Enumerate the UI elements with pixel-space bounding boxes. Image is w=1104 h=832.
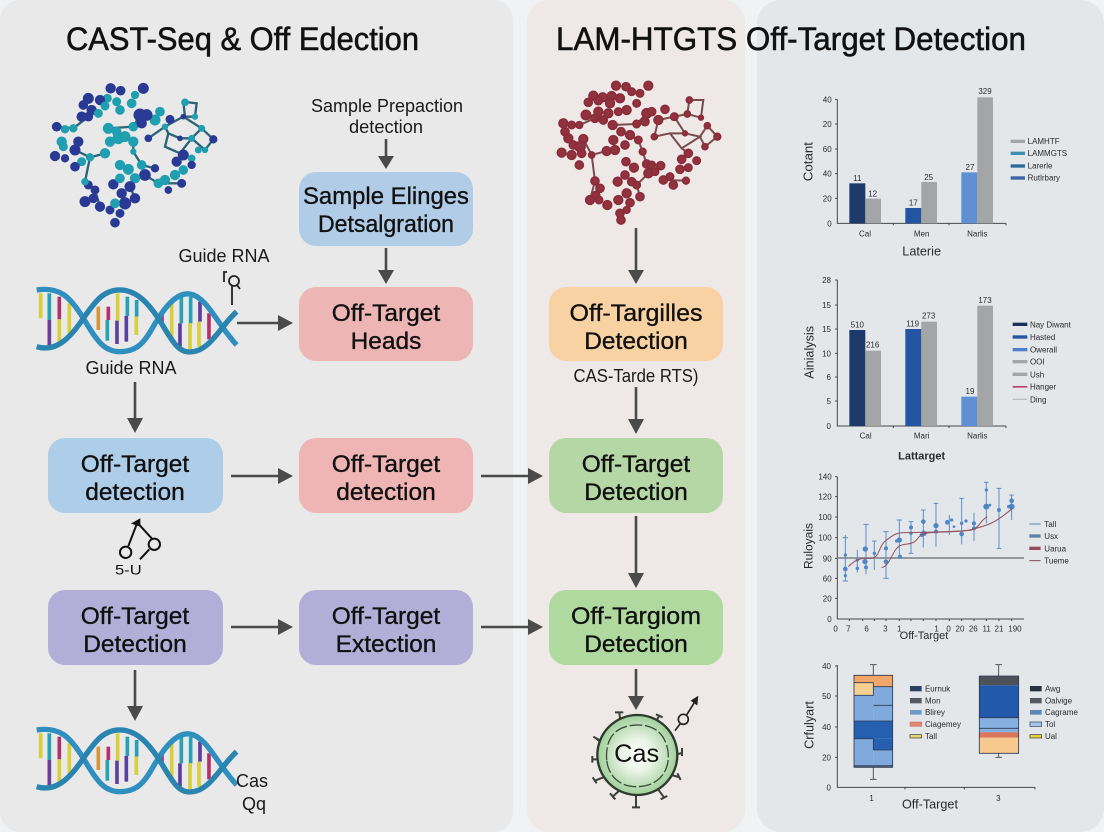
arrow: to sample box [378, 139, 394, 169]
chart: grouped bars 1: Larerle [1028, 162, 1053, 171]
chart: stacked boxes: 40 [822, 723, 832, 732]
chart: grouped bars 1: 11 [853, 174, 862, 183]
box: heads: Heads [351, 328, 421, 355]
label: Guide RNA lower: Guide RNA [85, 358, 177, 378]
arrow: purple to green [481, 619, 543, 635]
chart: stacked boxes: Mon [925, 696, 941, 705]
chart: grouped bars 1: 60 [823, 145, 832, 154]
chart: grouped bars 2: Lattarget [898, 450, 945, 462]
chart: scatter with error bars: 0 [833, 624, 838, 633]
arrow: blue to red [231, 468, 293, 484]
chart: scatter with error bars: 21 [995, 624, 1004, 633]
chart: grouped bars 1: 12 [868, 190, 878, 199]
chart: scatter with error bars: Usx [1044, 532, 1058, 541]
box: green targiom: Detection [584, 631, 688, 658]
chart: scatter with error bars: 0 [946, 624, 951, 633]
arrow: sample to heads [378, 248, 394, 284]
chart: scatter with error bars: 20 [956, 624, 965, 633]
chart: stacked boxes: Off-Target [902, 798, 958, 812]
chart: grouped bars 2: 0 [827, 422, 832, 431]
chart: grouped bars 2: 5 [827, 397, 832, 406]
chart: grouped bars 1: 0 [827, 219, 832, 228]
box: heads [299, 287, 473, 361]
chart: grouped bars 1: Cal [859, 230, 871, 239]
chart: scatter with error bars: Tall [1044, 520, 1057, 529]
chart: grouped bars 2: 173 [978, 296, 992, 305]
arrow: green to Cas [628, 669, 644, 710]
chart: scatter with error bars: Ruloyais [801, 523, 815, 569]
chart: stacked boxes: Eurnuk [925, 684, 950, 693]
chart: grouped bars 1: Laterie [902, 244, 941, 258]
chart: stacked boxes: 1 [869, 794, 874, 803]
chart: scatter with error bars: 140 [818, 473, 832, 482]
box: blue detection: detection [85, 479, 185, 506]
icon: branching node diagram: 5-U [115, 561, 142, 577]
chart: grouped bars 2: 15 [822, 325, 832, 334]
chart: grouped bars 1: LAMHTF [1028, 137, 1060, 146]
label: CAS-Tarde: CAS-Tarde RTS) [574, 366, 698, 386]
chart: scatter with error bars: 1 [897, 624, 902, 633]
icon: branching node diagram [115, 520, 160, 577]
icon: Cas virus particle: Cas [614, 740, 659, 768]
icon: blue molecule [51, 84, 217, 227]
chart: scatter with error bars: 100 [818, 513, 832, 522]
label: detection: detection [349, 117, 423, 137]
chart: grouped bars 1: Men [914, 230, 929, 239]
chart: scatter with error bars: Tueme [1044, 557, 1069, 566]
chart: grouped bars 2: Nay Diwant [1030, 320, 1072, 329]
chart: scatter with error bars: 90 [823, 554, 832, 563]
chart: stacked boxes [803, 662, 1078, 812]
label: Cas: Cas [236, 771, 268, 791]
chart: stacked boxes: Crfulyart [803, 701, 817, 749]
box: sample: Sample Elinges [303, 183, 469, 210]
chart: grouped bars 1: 40 [823, 95, 832, 104]
chart: stacked boxes: Ual [1045, 732, 1057, 741]
arrow: DNA to heads [237, 315, 293, 331]
chart: stacked boxes: 0 [827, 784, 832, 793]
chart: grouped bars 2: Ding [1030, 395, 1046, 404]
chart: grouped bars 2: 28 [822, 276, 832, 285]
icon: DNA helix top [37, 289, 237, 352]
box: heads: Off-Target [332, 300, 440, 327]
arrow: molecule to orange [628, 228, 644, 284]
chart: stacked boxes: Blirey [925, 708, 945, 717]
panel: charts background [757, 0, 1104, 832]
chart: scatter with error bars: 20 [823, 594, 832, 603]
box: sample: Detsalgration [318, 211, 454, 238]
box: sample [299, 172, 473, 246]
chart: scatter with error bars: 60 [823, 574, 832, 583]
chart: grouped bars 2: OOI [1030, 358, 1045, 367]
box: orange detection [549, 287, 723, 361]
box: purple extection: Extection [336, 631, 436, 658]
arrow: label to green [628, 387, 644, 434]
icon: guide marker [224, 272, 240, 305]
box: red detection [299, 438, 473, 513]
chart: grouped bars 2: Ainialysis [802, 326, 816, 379]
chart: scatter with error bars: 7 [846, 624, 851, 633]
box: purple extection: Off-Target [332, 603, 440, 630]
box: purple extection [299, 590, 473, 665]
chart: grouped bars 2: Cal [860, 431, 872, 440]
chart: grouped bars 2: Hanger [1030, 383, 1057, 392]
chart: grouped bars 1: 40 [823, 170, 832, 179]
arrow: red to green [481, 468, 543, 484]
chart: grouped bars 2: Owerall [1030, 346, 1057, 355]
box: purple detection: Detection [83, 631, 187, 658]
chart: stacked boxes: 20 [822, 753, 832, 762]
chart: grouped bars 2: Ush [1030, 370, 1044, 379]
chart: scatter with error bars: 1 [934, 624, 939, 633]
chart: stacked boxes: Oalvige [1045, 696, 1073, 705]
chart: grouped bars 2: 6 [827, 373, 832, 382]
icon: Cas virus particle [592, 697, 697, 807]
chart: grouped bars 2: 19 [966, 387, 975, 396]
box: blue detection [48, 438, 223, 513]
chart: scatter with error bars [801, 473, 1069, 642]
chart: scatter with error bars: 190 [1008, 624, 1022, 633]
chart: stacked boxes: 50 [822, 692, 832, 701]
chart: scatter with error bars: 6 [864, 624, 869, 633]
chart: scatter with error bars: 100 [818, 534, 832, 543]
chart: grouped bars 1: 20 [823, 194, 832, 203]
chart: grouped bars 1: LAMMGTS [1028, 149, 1067, 158]
chart: grouped bars 1 [800, 87, 1067, 258]
chart: scatter with error bars: 120 [818, 493, 832, 502]
label: Guide RNA top: Guide RNA [178, 246, 270, 266]
chart: stacked boxes: Tol [1045, 720, 1055, 729]
chart: stacked boxes: 3 [996, 794, 1001, 803]
chart: grouped bars 2: 119 [906, 319, 920, 328]
box: green detection: Detection [584, 479, 688, 506]
chart: grouped bars 1: Narlis [967, 230, 988, 239]
chart: scatter with error bars: 26 [969, 624, 978, 633]
box: green targiom [549, 590, 723, 665]
box: green targiom: Off-Targiom [571, 603, 701, 630]
title: LAM-HTGTS: LAM-HTGTS Off-Target Detection [556, 21, 1026, 57]
chart: stacked boxes: Ciagemey [925, 720, 961, 729]
chart: grouped bars 1: 27 [966, 163, 975, 172]
box: orange detection: Off-Targilles [570, 300, 702, 327]
label: Qq: Qq [242, 794, 266, 814]
chart: scatter with error bars: Uarua [1044, 544, 1067, 553]
chart: grouped bars 2: 510 [851, 321, 865, 330]
icon: red molecule [557, 81, 721, 224]
arrow: purple to purple [231, 619, 293, 635]
box: green detection: Off-Target [582, 451, 690, 478]
box: purple detection: Off-Target [81, 603, 189, 630]
chart: scatter with error bars: 0 [827, 615, 832, 624]
panel: CAST-Seq background [0, 0, 513, 832]
chart: grouped bars 1: 25 [924, 173, 934, 182]
chart: grouped bars 1: Cotant [800, 142, 815, 181]
chart: stacked boxes: 40 [822, 662, 832, 671]
chart: grouped bars 2: 216 [866, 341, 880, 350]
chart: stacked boxes: Tall [925, 732, 937, 741]
chart: grouped bars 1: Rutlrbary [1028, 174, 1060, 183]
chart: grouped bars 1: 20 [823, 120, 832, 129]
box: orange detection: Detection [584, 328, 688, 355]
box: purple detection [48, 590, 223, 665]
box: red detection: detection [336, 479, 436, 506]
arrow: guide to blue [127, 382, 143, 433]
chart: grouped bars 2: 15 [822, 301, 832, 310]
chart: stacked boxes: Cagrame [1045, 708, 1078, 717]
box: blue detection: Off-Target [81, 451, 189, 478]
box: green detection [549, 438, 723, 513]
arrow: green to green [628, 516, 644, 588]
chart: grouped bars 2: Mari [914, 431, 930, 440]
chart: grouped bars 2: 10 [822, 349, 832, 358]
arrow: purple to DNA [127, 670, 143, 721]
box: red detection: Off-Target [332, 451, 440, 478]
label: sample preparation: Sample Prepaction [311, 96, 463, 116]
icon: DNA helix bottom [37, 729, 237, 792]
chart: scatter with error bars: Off-Target [900, 630, 948, 642]
panel: LAM-HTGTS background [527, 0, 745, 832]
chart: grouped bars 1: 17 [909, 199, 918, 208]
chart: stacked boxes: Awg [1045, 684, 1060, 693]
chart: grouped bars 1: 329 [978, 87, 992, 96]
chart: grouped bars 2: Hasted [1030, 333, 1055, 342]
chart: scatter with error bars: 11 [982, 624, 991, 633]
chart: grouped bars 2: 273 [922, 311, 936, 320]
chart: grouped bars 2 [802, 276, 1072, 462]
title: CAST-Seq: CAST-Seq & Off Edection [66, 21, 419, 57]
chart: scatter with error bars: 3 [883, 624, 888, 633]
chart: grouped bars 2: Narlis [967, 431, 988, 440]
